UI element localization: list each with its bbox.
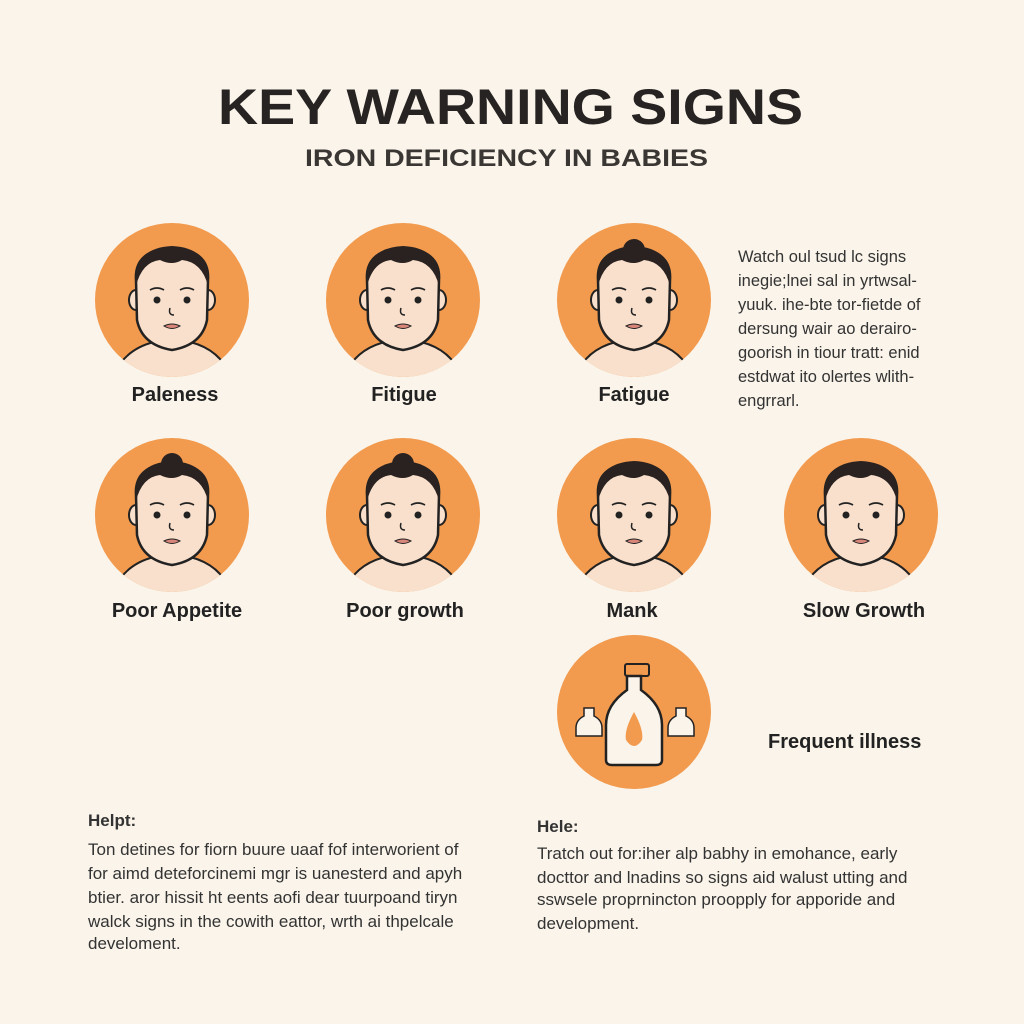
sign: mank: [557, 438, 711, 622]
text block: watch out: inegie;lnei sal in yrtwsal-: [738, 272, 917, 290]
text block: watch out: dersung wair ao derairo-: [738, 320, 917, 338]
text block: watch out: Watch oul tsud lc signs: [738, 248, 906, 266]
text block: helpt: [87, 811, 462, 953]
text block: hele: sswsele proprnincton proopply for apporide and: [537, 890, 895, 909]
sign: poor growth: Poor growth: [346, 600, 464, 622]
text block: hele: Hele:: [537, 817, 579, 836]
subtitle: IRON DEFICIENCY IN BABIES: [305, 145, 708, 172]
text block: hele: Tratch out for:iher alp babhy in emohance, early: [537, 844, 898, 863]
sign: slow growth: Slow Growth: [803, 600, 925, 622]
sign: slow growth: [784, 438, 938, 622]
text block: hele: docttor and lnadins so signs aid walust utting and: [537, 868, 907, 887]
sign: fatigue: Fatigue: [598, 384, 670, 406]
text block: watch out: goorish in tiour tratt: enid: [738, 344, 920, 362]
text block: helpt: for aimd deteforcinemi mgr is uanesterd and apyh: [88, 864, 462, 883]
sign: paleness: [95, 223, 249, 406]
label: frequent illness: Frequent illness: [768, 731, 921, 753]
text block: watch out: engrrarl.: [738, 392, 799, 410]
sign: fatigue: [557, 223, 711, 406]
text block: watch out: estdwat ito olertes wlith-: [738, 368, 914, 386]
text block: helpt: walck signs in the cowith eattor, wrth ai thpelcale: [87, 912, 454, 931]
icon: bottles: [557, 635, 711, 789]
title: KEY WARNING SIGNS: [218, 79, 803, 135]
sign: paleness: Paleness: [132, 384, 218, 406]
text block: helpt: develoment.: [88, 934, 181, 953]
text block: helpt: Helpt:: [88, 811, 136, 830]
sign: poor growth: [326, 438, 480, 622]
text block: hele: [537, 817, 907, 933]
sign: fitigue: Fitigue: [371, 384, 437, 406]
sign: mank: Mank: [606, 600, 658, 622]
text block: hele: development.: [537, 914, 639, 933]
sign: fitigue: [326, 223, 480, 406]
text block: watch out: yuuk. ihe-bte tor-fietde of: [738, 296, 921, 314]
text block: helpt: Ton detines for fiorn buure uaaf fof interworient of: [88, 840, 459, 859]
sign: poor appetite: Poor Appetite: [112, 600, 242, 622]
text block: helpt: btier. aror hissit ht eents aofi dear tuurpoand tiryn: [88, 888, 457, 907]
sign: poor appetite: [95, 438, 249, 622]
